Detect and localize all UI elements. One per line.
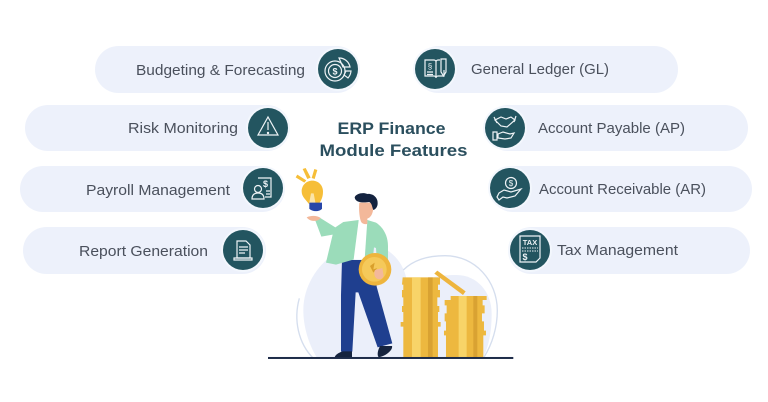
panel: account receivable: [488, 166, 752, 212]
shoes: [335, 346, 392, 357]
icon: tax form: TAX: [523, 238, 537, 247]
panel: payroll management: Payroll Management: [86, 182, 231, 199]
icon: coin above hand: $: [509, 179, 514, 188]
hair: [355, 193, 378, 210]
panel: budgeting and forecasting: Budgeting & Forecasting: [136, 62, 305, 79]
held coin: [359, 253, 391, 286]
icon: person with pay slip: $: [263, 179, 268, 189]
shirt: [354, 221, 367, 259]
icon: person with pay slip: [241, 166, 285, 210]
ground line: [268, 357, 513, 359]
panel: general ledger: General Ledger (GL): [471, 61, 609, 78]
illustration: man with light bulb and coin stacks: [268, 168, 513, 359]
panel: account payable: [483, 105, 748, 151]
panel: risk monitoring: Risk Monitoring: [128, 120, 238, 137]
icon: ledger book and pen: [413, 47, 457, 91]
icon: coin with pie chart: [316, 47, 360, 91]
light bulb: [296, 168, 323, 211]
panel: tax management: [508, 227, 750, 274]
panel: report generation: [23, 227, 266, 274]
icon: ledger book and pen: §: [428, 62, 432, 71]
icon: coin with pie chart: $: [332, 66, 338, 76]
icon: warning triangle: [246, 106, 290, 150]
trousers: [341, 260, 392, 352]
hand: [307, 216, 321, 221]
panel: general ledger: [413, 46, 678, 93]
panel: payroll management: [20, 166, 285, 212]
icon: handshake over hand: [483, 106, 527, 150]
title: [320, 119, 468, 160]
icon: tax form: [508, 228, 552, 272]
man: [307, 193, 392, 357]
coin stacks: [401, 271, 487, 357]
icon: coin above hand: [488, 166, 532, 210]
icon: tax form: $: [522, 252, 528, 262]
panel: report generation: Report Generation: [79, 243, 208, 260]
title: Module Features: [320, 141, 468, 160]
icon: report document: [221, 228, 265, 272]
title: ERP Finance: [338, 119, 446, 138]
panel: account receivable: Account Receivable (AR): [539, 181, 706, 198]
panel: tax management: Tax Management: [557, 242, 679, 259]
head: [359, 203, 373, 224]
background circles: [297, 243, 497, 358]
panel: account payable: Account Payable (AP): [538, 120, 685, 137]
panel: budgeting and forecasting: [95, 46, 360, 93]
panel: risk monitoring: [25, 105, 290, 151]
jacket: [315, 217, 388, 268]
